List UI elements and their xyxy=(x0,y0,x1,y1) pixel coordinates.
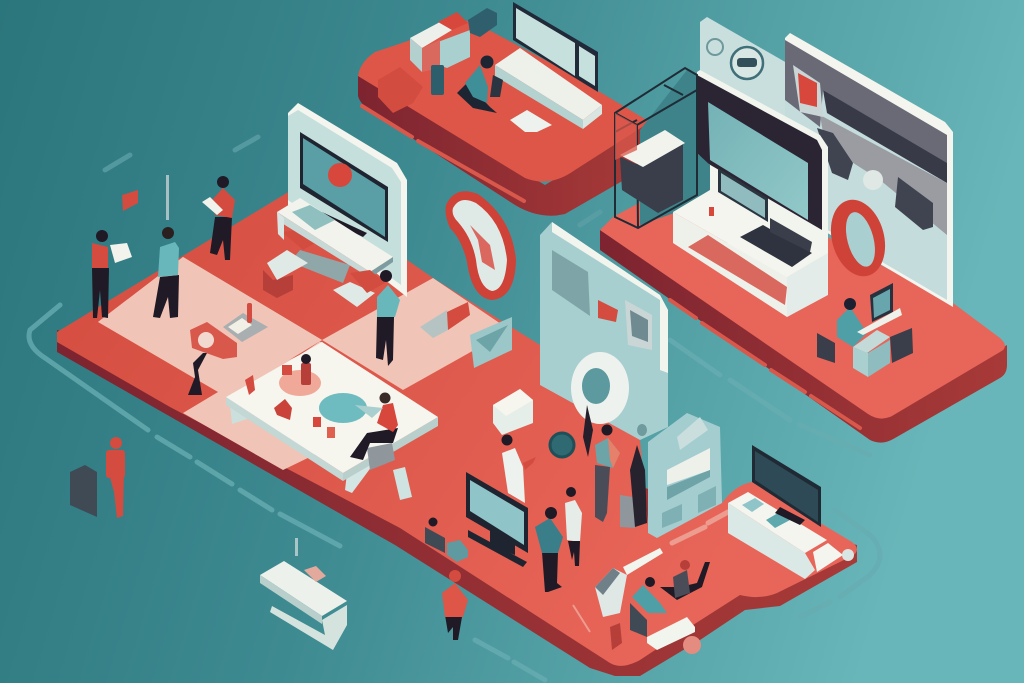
doctor in white xyxy=(502,448,525,503)
line marker xyxy=(573,605,590,632)
pole xyxy=(166,175,169,220)
lone figure left xyxy=(70,437,125,518)
pink floor tile right xyxy=(322,278,510,390)
shelves xyxy=(290,250,350,283)
table items xyxy=(279,370,321,396)
tablet on floor xyxy=(420,302,470,338)
tall panel xyxy=(288,103,407,297)
meeting group bottom xyxy=(573,548,710,654)
white document cabinet xyxy=(648,413,722,538)
large white table xyxy=(226,342,438,493)
red blob chair xyxy=(378,67,423,113)
large back panel xyxy=(785,33,953,307)
floating red bean sign xyxy=(446,191,516,300)
floating red tag xyxy=(122,190,138,211)
right platform xyxy=(600,17,1007,443)
man grey xyxy=(595,465,610,522)
suitcase xyxy=(620,495,635,528)
tv screen xyxy=(300,132,388,242)
envelope panel xyxy=(470,317,512,368)
faint floor strips xyxy=(672,512,728,543)
man teal vest xyxy=(542,552,562,592)
white cubes xyxy=(493,389,533,435)
right platform side xyxy=(600,230,1007,443)
small floor tray xyxy=(223,303,268,342)
keyboard xyxy=(740,225,812,267)
white box on floor xyxy=(510,110,552,132)
upper platform xyxy=(358,2,650,216)
person centre teal xyxy=(376,270,400,366)
main platform side xyxy=(57,330,857,676)
dark hexagons xyxy=(817,128,853,180)
white bench lower left xyxy=(260,538,347,650)
cabinet blocks xyxy=(430,30,470,68)
table legs and shadow xyxy=(230,405,250,424)
person in red bottom xyxy=(442,570,468,640)
gear icon xyxy=(550,433,574,457)
pink floor tile left xyxy=(98,257,345,470)
red blob with small figure xyxy=(188,322,237,395)
large monitor xyxy=(697,70,828,317)
main platform top xyxy=(57,185,857,666)
dark leaf xyxy=(583,405,593,457)
tall round kiosk panel xyxy=(540,222,668,440)
person teal shirt xyxy=(153,227,179,318)
group of people centre xyxy=(502,424,647,592)
woman white coat xyxy=(565,500,582,542)
glass cage xyxy=(640,70,697,225)
right platform top xyxy=(600,170,1005,419)
stand base xyxy=(322,212,367,237)
floor path outline xyxy=(29,137,880,680)
main platform xyxy=(57,185,857,676)
red ring xyxy=(823,194,893,282)
desktop computer monitor xyxy=(425,472,528,567)
upper platform side xyxy=(358,76,650,216)
TV stand with monitor xyxy=(263,103,407,307)
monitor xyxy=(513,2,598,92)
right monitor and desk xyxy=(728,445,854,579)
upper platform top xyxy=(358,20,650,182)
side stripes xyxy=(362,106,524,201)
seated person at table xyxy=(350,392,412,500)
small back panel xyxy=(700,17,787,125)
white desk unit xyxy=(673,212,787,317)
white desk xyxy=(495,48,602,120)
side stripes xyxy=(670,300,860,428)
seated worker with laptop xyxy=(817,283,913,377)
person with clipboard top xyxy=(202,176,235,260)
document card xyxy=(793,65,823,117)
seated person xyxy=(457,56,503,113)
person with papers left xyxy=(92,230,132,318)
dark box inside cage xyxy=(620,143,683,213)
dark woman xyxy=(630,445,647,527)
